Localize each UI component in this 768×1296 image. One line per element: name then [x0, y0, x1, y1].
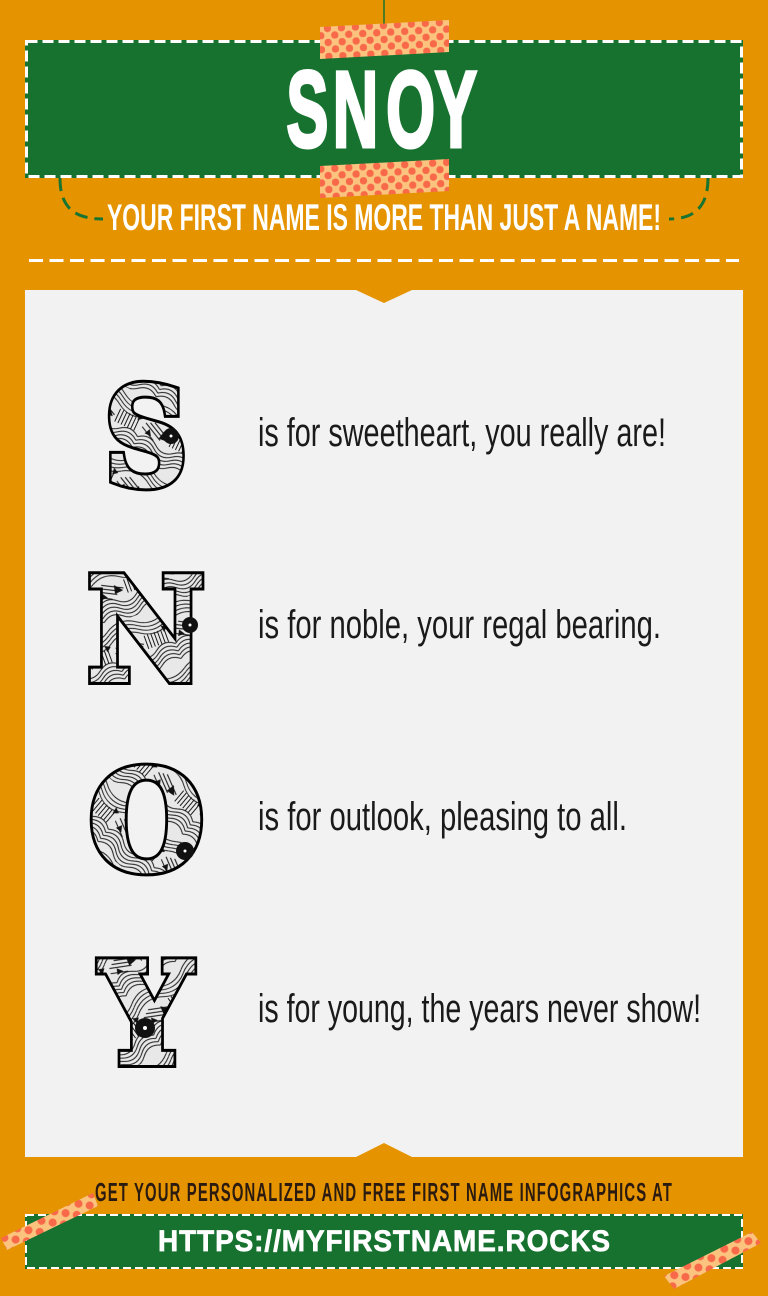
row 2: letter N: N: [88, 548, 204, 714]
row 1: letter S: [105, 360, 666, 516]
tape: footer right: [664, 1232, 761, 1289]
row 3: letter O: is for outlook, pleasing to all.: [258, 795, 627, 839]
tape: footer left: [1, 1193, 98, 1250]
row 2: letter N: [88, 548, 661, 714]
row 4: letter Y: [99, 932, 701, 1096]
row 4: letter Y: Y: [99, 932, 192, 1096]
row 1: letter S: S: [105, 360, 187, 516]
url: HTTPS://MYFIRSTNAME.ROCKS: [158, 1225, 611, 1258]
hanging string: [383, 0, 385, 24]
left dashed bracket: [60, 178, 103, 219]
row 1: letter S: S: [105, 360, 187, 516]
row 3: letter O: [90, 742, 627, 902]
title: SNOY: SNOY: [287, 49, 477, 170]
row 2: letter N: N: [88, 548, 204, 714]
row 3: letter O: O: [90, 742, 204, 902]
footer url banner: [25, 1214, 743, 1269]
white content panel: [25, 290, 743, 1157]
row 4: letter Y: Y: [99, 932, 192, 1096]
row 3: letter O: O: [90, 742, 204, 902]
tape: bottom of banner: [320, 159, 449, 198]
right dashed bracket: [669, 178, 708, 219]
tape: top of banner: [320, 20, 449, 59]
title banner: [25, 40, 743, 178]
